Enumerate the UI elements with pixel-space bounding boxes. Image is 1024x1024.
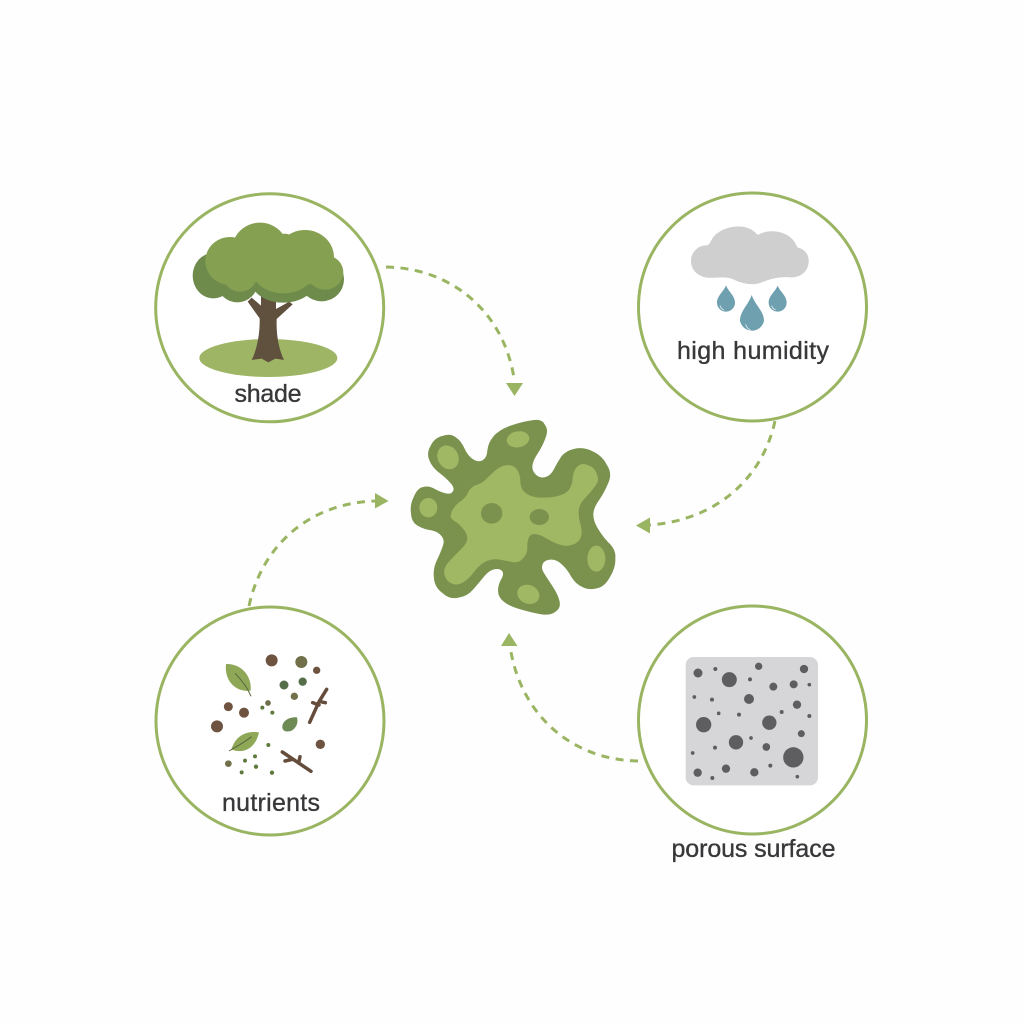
panel: porous surface	[638, 606, 866, 863]
label: porous surface: porous surface	[672, 835, 836, 863]
panel: nutrients	[156, 607, 384, 835]
arrow: shade to moss	[386, 267, 523, 396]
label: shade: shade	[234, 380, 302, 408]
arrow: porous surface to moss	[501, 633, 638, 761]
central moss blob	[412, 421, 614, 613]
icon: porous block	[686, 657, 818, 785]
arrow: high humidity to moss	[636, 421, 775, 534]
icon: rain cloud	[691, 227, 809, 331]
panel: shade	[156, 194, 384, 422]
label: high humidity: high humidity	[677, 337, 830, 365]
icon: nutrients scatter	[211, 654, 327, 775]
icon: tree	[193, 223, 344, 377]
panel: high humidity	[638, 193, 866, 421]
label: nutrients: nutrients	[222, 789, 320, 817]
arrow: nutrients to moss	[249, 493, 388, 606]
